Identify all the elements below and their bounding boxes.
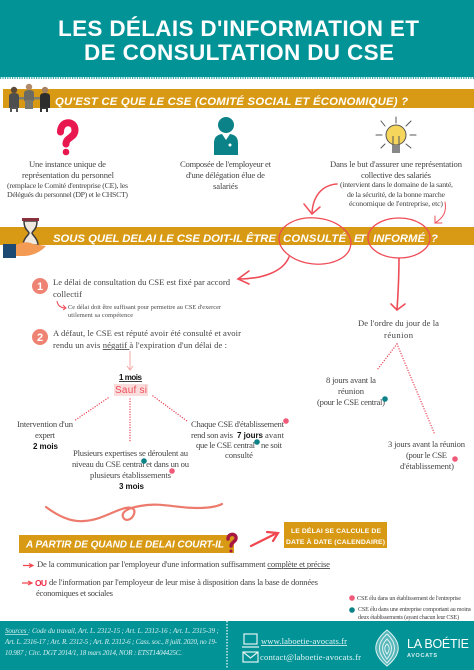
legend: CSE élu dans une entreprise comportant au moins (358, 606, 472, 613)
exception: expert: Intervention d'un (17, 419, 74, 429)
logo: name: AVOCATS (407, 653, 437, 659)
icon: arrow to section 2 left (304, 184, 337, 214)
arrow: to one month (127, 351, 133, 370)
text: agenda: réunion (384, 330, 414, 340)
section 2 heading (0, 227, 474, 245)
text: unique instance (7, 159, 128, 199)
bullet: availability: de l'information par l'employeur de leur mise à disposition dans la base de données (49, 577, 319, 587)
text: composition: Composée de l'employeur et (180, 159, 272, 169)
text: purpose (330, 159, 463, 208)
dotted connectors: agenda (377, 344, 435, 435)
decorative knot stroke (46, 504, 222, 521)
icon: laptop (242, 634, 259, 647)
email: contact@laboetie-avocats.fr (260, 652, 361, 662)
panel: what is the CSE, column 1 (7, 123, 128, 199)
logo: name: LA BOÉTIE (407, 636, 469, 651)
exception: each establishment: Chaque CSE d'établissement (191, 419, 285, 429)
panel: what is the CSE, column 2 (180, 117, 272, 191)
icon: person (214, 117, 238, 155)
icon: number 2: 2 (37, 332, 43, 344)
section 2 heading: CONSULTÉ (283, 232, 346, 245)
icon: light bulb (376, 117, 416, 153)
arrow: consulté to delay text (238, 257, 289, 284)
sources: Art. L. 2316-17 ; Art. R. 2312-5 ; Art. R. 2312-6 ; Cass. soc., 8 juill. 2020, no 19- (4, 638, 218, 646)
section 2 heading: ET (354, 233, 367, 245)
text: 3 days: d'établissement) (400, 461, 454, 471)
legend: CSE élu dans un établissement de l'entreprise (357, 595, 461, 602)
bullet: availability: OU (35, 578, 47, 588)
text: step 1: Le délai de consultation du CSE est fixé par accord (53, 277, 231, 287)
text: composition: salariés (213, 181, 239, 191)
callout: date to date: LE DÉLAI SE CALCULE DE (291, 526, 381, 535)
icon: number 1: 1 (37, 281, 43, 293)
text: unique instance: (remplace le Comité d'entreprise (CE), les (7, 181, 128, 190)
icon: meeting people (9, 84, 50, 112)
text: unique instance: Délégués du personnel (DP) et le CHSCT) (7, 190, 128, 199)
step 1 (32, 277, 231, 319)
exception: each establishment: rend son avis (191, 430, 234, 440)
callout: date to date (284, 522, 387, 548)
section 1 heading: QU'EST CE QUE LE CSE (COMITÉ SOCIAL ET ÉCONOMIQUE) ? (55, 95, 408, 108)
exception: several expertises: 3 mois (119, 482, 145, 491)
note: sufficient delay: utilement sa compétence (68, 312, 133, 319)
logo: name (407, 636, 469, 659)
text: step 2: A défaut, le CSE est réputé avoir été consulté et avoir (53, 328, 241, 338)
text: 8 days: 8 jours avant la (326, 375, 376, 385)
icon: number 2 (32, 329, 48, 345)
arrow: to calendar box (251, 532, 278, 546)
icon: number 1 (32, 278, 48, 294)
section 2 heading: ? (431, 233, 438, 245)
text: 3 days: 3 jours avant la réunion (388, 439, 466, 449)
sources: Sources : Code du travail, Art. L. 2312-15 ; Art. L. 2312-16 ; Art. L. 2315-39 ; (5, 627, 219, 635)
note: sufficient delay (68, 304, 221, 319)
text: purpose: économique de l'entreprise, etc) (349, 199, 443, 208)
exception: expert (17, 419, 74, 451)
exception: several expertises (72, 448, 190, 491)
exception: each establishment: 7 jours (237, 431, 264, 440)
exception: several expertises: plusieurs établissements (90, 470, 172, 480)
footer (0, 621, 474, 670)
exception: expert: 2 mois (33, 442, 59, 451)
bullet: availability (22, 577, 319, 598)
text: step 1 (53, 277, 231, 299)
arrow: small note arrow (57, 301, 66, 310)
text: purpose: Dans le but d'assurer une représentation (330, 159, 463, 169)
title: DE CONSULTATION DU CSE (84, 40, 394, 65)
legend: deux établissements (ayant chacun leur CSE) (358, 614, 459, 621)
text: 3 days: (pour le CSE (406, 450, 447, 460)
legend (349, 595, 472, 621)
logo: leaf (376, 630, 398, 666)
text: agenda (358, 318, 439, 340)
exception: several expertises: niveau du CSE central et dans un ou (72, 459, 190, 469)
text: 8 days: (pour le CSE central) (317, 397, 385, 407)
title (58, 16, 419, 65)
exception: each establishment: que le CSE central (196, 440, 256, 450)
text: purpose: de la sécurité, de la bonne marche (347, 190, 446, 199)
callout: circle around consulté (277, 214, 353, 268)
text: unique instance: représentation du personnel (22, 170, 115, 180)
section 2 heading: INFORMÉ (373, 232, 425, 245)
except if label: Sauf si (115, 385, 147, 396)
icon: crimson question mark (228, 534, 236, 552)
text: composition (180, 159, 272, 191)
text: agenda: De l'ordre du jour de la (358, 318, 439, 328)
bullet: communication: De la communication par l'employeur d'une information suffisamment complète et précise (37, 559, 330, 569)
exception: each establishment (191, 418, 289, 460)
callout: circle around informé (368, 218, 430, 258)
text: purpose: (intervient dans le domaine de la santé, (340, 180, 453, 189)
text: step 2 (53, 328, 241, 350)
exception: several expertises: Plusieurs expertises se déroulent au (73, 448, 189, 458)
exception: each establishment: avant (265, 430, 285, 440)
sources (4, 627, 219, 657)
panel: what is the CSE, column 3 (330, 117, 463, 208)
callout: date to date: DATE À DATE (CALENDAIRE) (286, 537, 385, 546)
arrow: informé to agenda (391, 258, 405, 310)
note: sufficient delay: Ce délai doit être suffisant pour permettre au CSE d'exercer (68, 304, 221, 311)
text: step 2: rendu un avis négatif à l'expiration d'un délai de : (53, 340, 227, 350)
icon: question mark (60, 123, 75, 155)
text: unique instance: Une instance unique de (29, 159, 106, 169)
text: step 1: collectif (53, 289, 82, 299)
one month label: 1 mois (119, 373, 143, 382)
dotted connectors: exceptions (74, 396, 187, 443)
title: LES DÉLAIS D'INFORMATION ET (58, 16, 419, 41)
icon: hourglass in hand (3, 218, 46, 258)
text: purpose: collective des salariés (361, 170, 432, 180)
icon: envelope (243, 652, 258, 662)
header banner (0, 0, 474, 78)
section 3 heading: A PARTIR DE QUAND LE DELAI COURT-IL (25, 540, 224, 550)
section 3 heading (19, 535, 234, 553)
text: composition: d'une délégation élue de (186, 170, 265, 180)
exception: expert: expert (35, 430, 56, 440)
text: 8 days (317, 375, 388, 407)
text: 8 days: réunion (338, 386, 365, 396)
exception: each establishment: ne soit (261, 440, 283, 450)
text: 3 days (388, 439, 466, 471)
section 2 heading: SOUS QUEL DELAI LE CSE DOIT-IL ÊTRE (53, 232, 276, 245)
bullet: availability: économiques et sociales (36, 588, 114, 598)
sources: 10.987 ; Circ. DGT 2014/1, 18 mars 2014, NOR : ETST1404425C. (5, 649, 182, 657)
step 2 (32, 328, 241, 350)
website: www.laboetie-avocats.fr (261, 636, 347, 646)
exception: each establishment: consulté (225, 450, 253, 460)
section 1 heading (3, 89, 474, 108)
icon: arrow to section 2 right (435, 202, 446, 223)
